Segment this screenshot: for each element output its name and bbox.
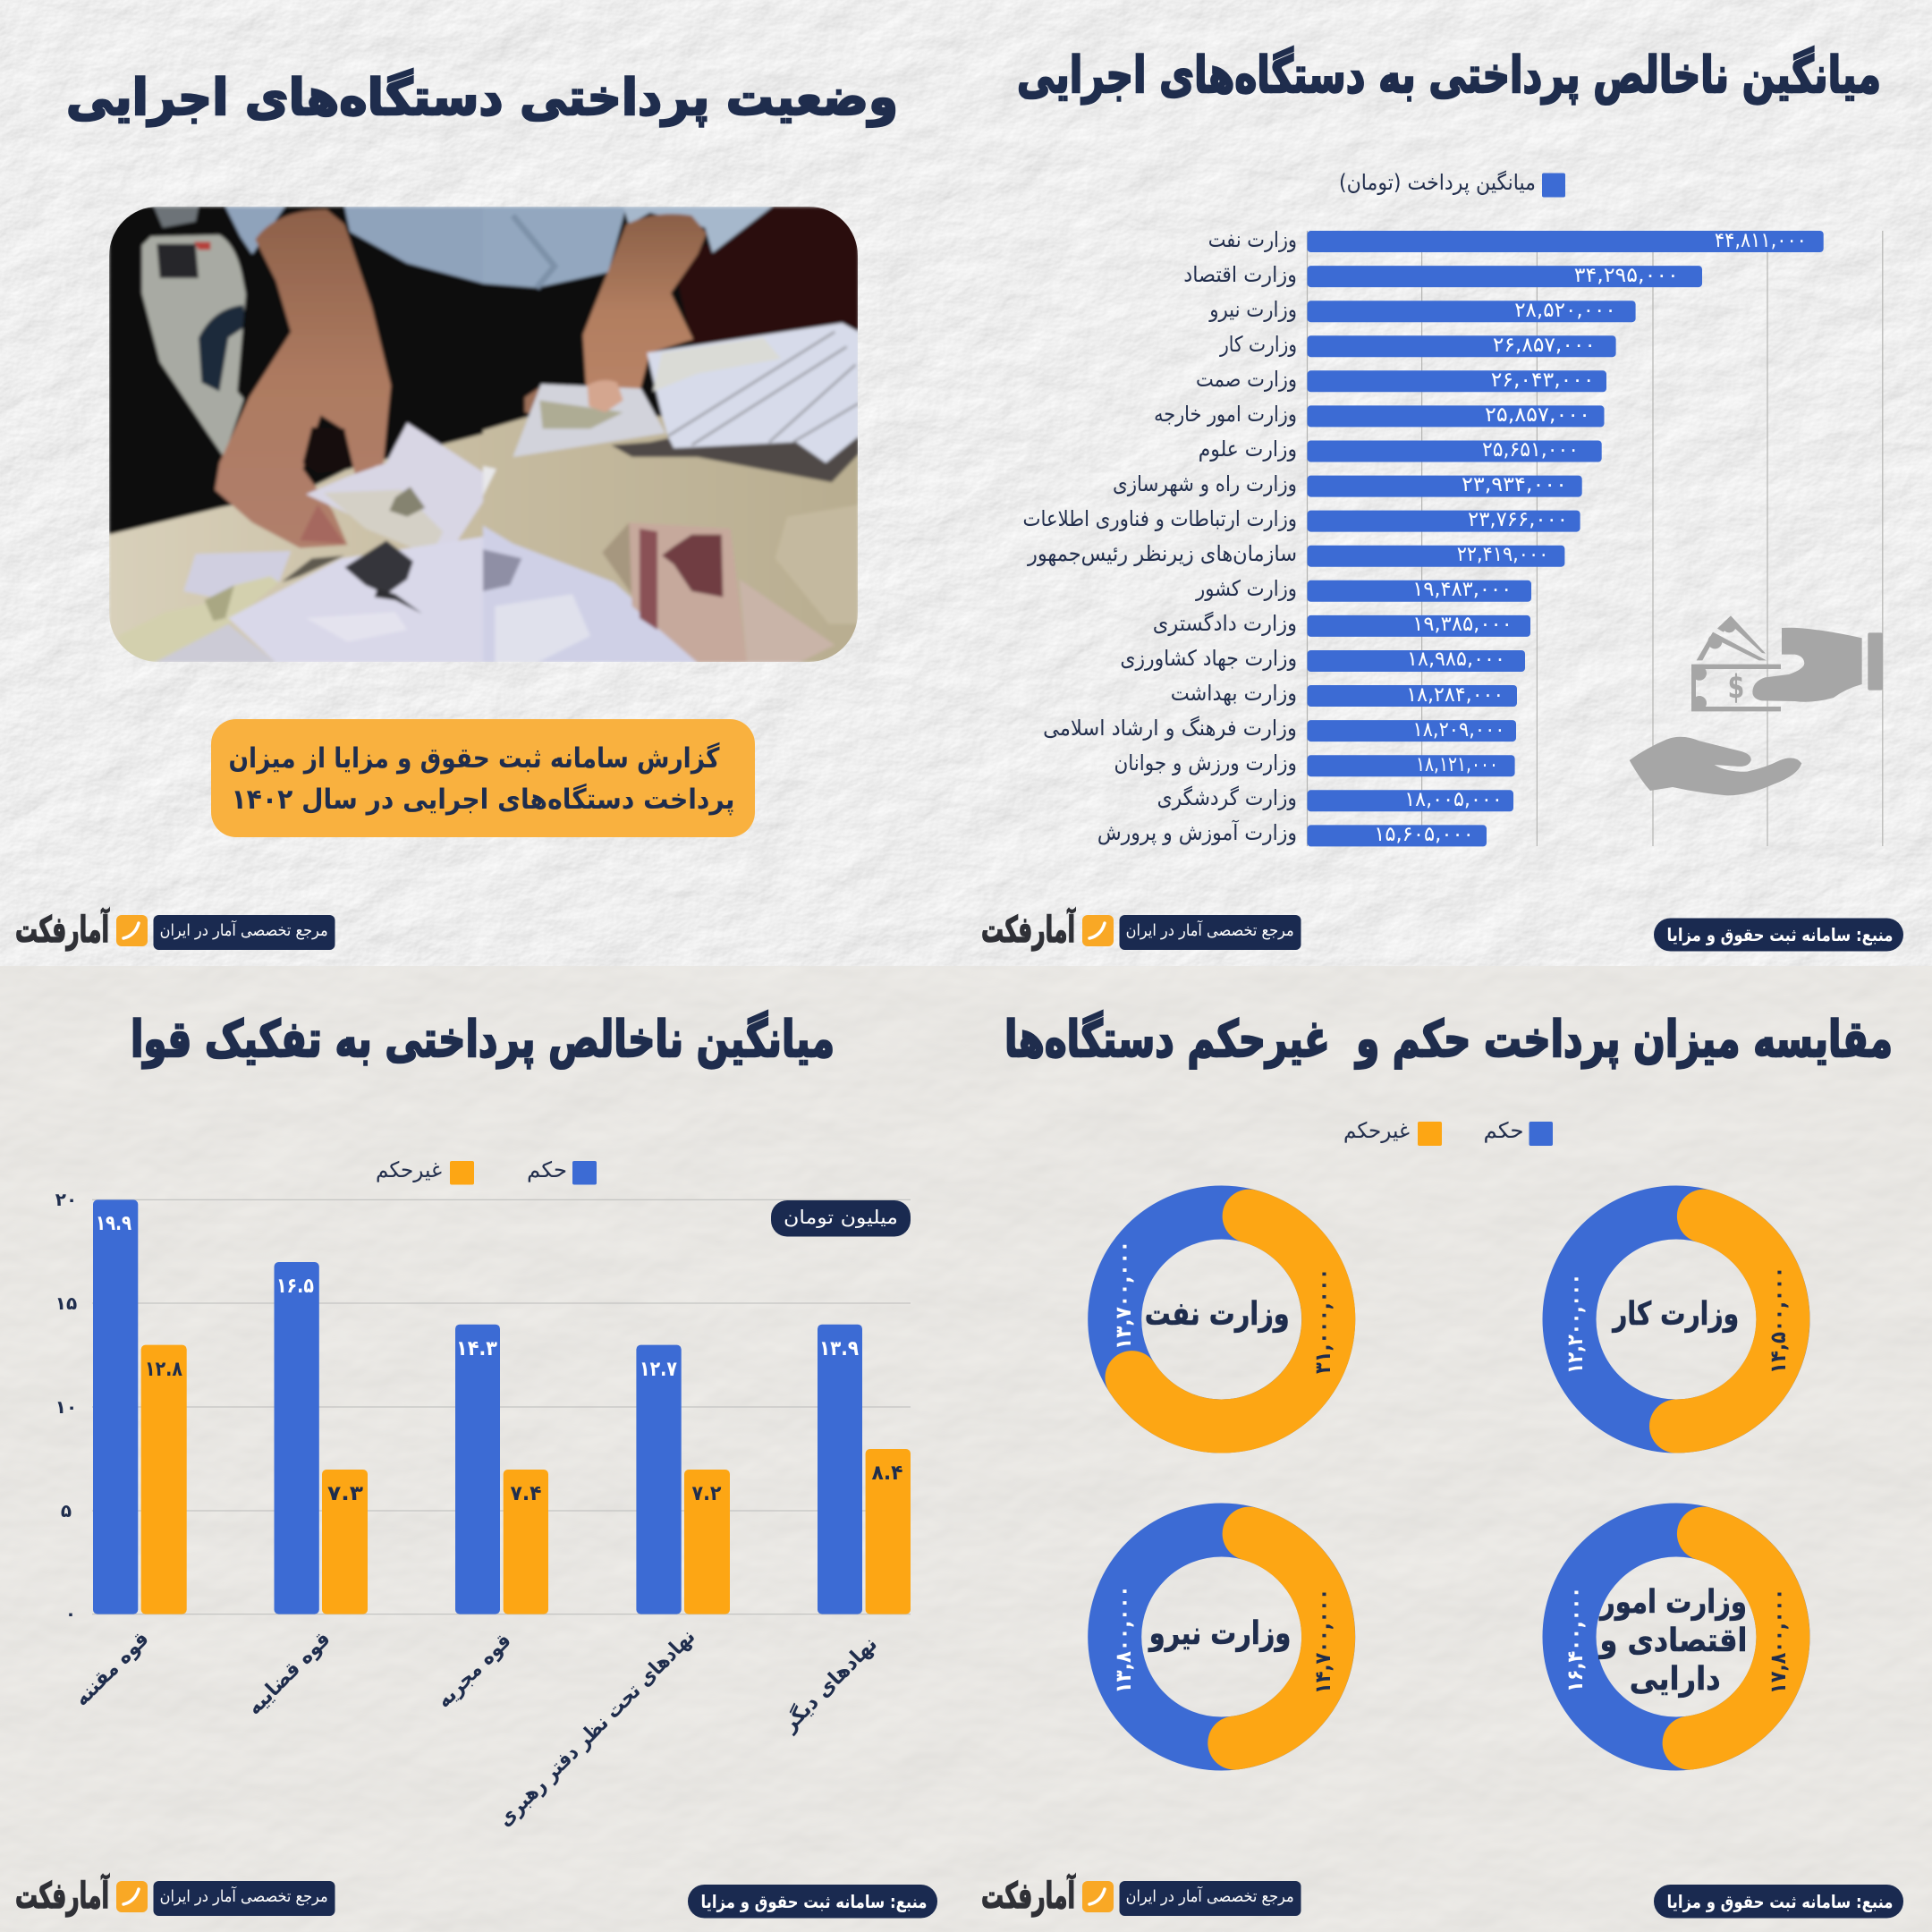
row: energy ministry: ۲۸,۵۲۰,۰۰۰	[1514, 299, 1616, 322]
row: education ministry: ۱۵,۶۰۵,۰۰۰	[1374, 823, 1474, 846]
x axis labels: نهادهای تحت نظر دفتر رهبری	[494, 1625, 699, 1831]
donut: oil ministry	[1111, 1213, 1335, 1427]
photo: hands counting banknotes	[109, 207, 859, 663]
row: health ministry	[1171, 681, 1517, 707]
columns: executive	[455, 1325, 548, 1614]
row: oil ministry: وزارت نفت	[1208, 227, 1297, 252]
row: interior ministry	[1195, 576, 1531, 602]
legend: decree and non-decree: غیرحکم	[376, 1157, 442, 1182]
row: health ministry: وزارت بهداشت	[1171, 681, 1297, 706]
row: communications ministry: وزارت ارتباطات و فناوری اطلاعات	[1023, 506, 1297, 531]
columns: leader's office bodies: ۷.۲	[692, 1482, 721, 1505]
columns: leader's office bodies	[636, 1345, 730, 1614]
logo: bottom left	[15, 1873, 335, 1917]
callout: report note: گزارش سامانه ثبت حقوق و مزایا از میزان	[229, 741, 720, 775]
columns: executive: ۱۴.۳	[456, 1337, 497, 1360]
donut: oil ministry: ۱۳,۷۰۰,۰۰۰	[1111, 1241, 1136, 1350]
columns: judiciary	[274, 1262, 368, 1614]
donut: energy ministry: وزارت نیرو	[1148, 1615, 1291, 1652]
row: culture ministry: ۱۸,۲۰۹,۰۰۰	[1413, 718, 1504, 741]
donut: economy ministry: اقتصادی و	[1598, 1623, 1748, 1659]
unit pill: میلیون تومان	[784, 1207, 898, 1228]
panel: top right bar chart	[981, 47, 1903, 952]
logo: top right	[981, 907, 1301, 951]
donut: labour ministry	[1563, 1213, 1791, 1426]
panel: bottom right donut charts	[981, 1011, 1903, 1918]
logo: bottom right	[981, 1873, 1301, 1917]
legend: decree and non-decree: حکم	[1483, 1118, 1524, 1143]
columns: legislature: ۱۹.۹	[96, 1212, 131, 1235]
row: culture ministry: وزارت فرهنگ و ارشاد اسلامی	[1043, 716, 1297, 741]
row: labour ministry	[1219, 332, 1616, 357]
logo: top right: آمارفکت	[981, 907, 1076, 951]
icon: hand giving money	[1630, 615, 1883, 795]
row: tourism ministry	[1157, 785, 1513, 811]
row: economy ministry: ۳۴,۲۹۵,۰۰۰	[1574, 264, 1679, 287]
row: science ministry: ۲۵,۶۵۱,۰۰۰	[1482, 438, 1579, 462]
row: foreign ministry: وزارت امور خارجه	[1154, 402, 1297, 427]
logo: bottom right: آمارفکت	[981, 1873, 1076, 1917]
row: sports ministry: ۱۸,۱۲۱,۰۰۰	[1416, 753, 1498, 776]
heading: pay by branch: میانگین ناخالص پرداختی به تفکیک قوا	[131, 1011, 835, 1069]
panel: top left intro	[15, 69, 898, 951]
row: roads ministry: وزارت راه و شهرسازی	[1113, 471, 1297, 496]
legend: decree and non-decree: غیرحکم	[1343, 1118, 1410, 1143]
grid lines	[1308, 231, 1883, 846]
grid lines	[92, 1199, 911, 1614]
row: roads ministry	[1113, 471, 1582, 497]
row: agriculture ministry	[1120, 646, 1525, 672]
y axis labels: ۱۵	[55, 1292, 77, 1314]
row: oil ministry: ۴۴,۸۱۱,۰۰۰	[1715, 229, 1807, 252]
y axis labels: ۲۰	[55, 1189, 77, 1210]
legend: average pay: میانگین پرداخت (تومان)	[1339, 170, 1536, 195]
columns: executive: ۷.۴	[510, 1482, 542, 1505]
row: energy ministry: وزارت نیرو	[1208, 297, 1297, 322]
panel: bottom left column chart	[15, 1011, 937, 1918]
row: industry ministry	[1196, 367, 1606, 392]
donut: labour ministry: وزارت کار	[1612, 1296, 1739, 1333]
row: foreign ministry	[1154, 402, 1605, 427]
donut: energy ministry: ۱۳,۸۰۰,۰۰۰	[1111, 1585, 1136, 1694]
y axis labels: ۱۰	[55, 1396, 77, 1418]
row: labour ministry: وزارت کار	[1219, 332, 1297, 357]
donut: economy ministry	[1563, 1530, 1791, 1744]
legend: decree and non-decree	[376, 1157, 597, 1184]
row: education ministry	[1097, 819, 1487, 846]
columns: legislature	[93, 1199, 187, 1614]
donut: oil ministry: ۳۱,۰۰۰,۰۰۰	[1310, 1268, 1335, 1374]
donut: economy ministry: وزارت امور	[1598, 1584, 1747, 1621]
row: justice ministry: ۱۹,۳۸۵,۰۰۰	[1412, 613, 1513, 636]
row: industry ministry: وزارت صمت	[1196, 367, 1297, 392]
legend: decree and non-decree: حکم	[527, 1157, 567, 1182]
row: education ministry: وزارت آموزش و پرورش	[1097, 819, 1297, 845]
donut: economy ministry: ۱۶,۴۰۰,۰۰۰	[1563, 1587, 1588, 1692]
source pill: top right	[1654, 918, 1903, 952]
row: sports ministry	[1114, 750, 1515, 776]
unit pill	[771, 1200, 911, 1236]
logo: top left	[15, 907, 335, 951]
row: economy ministry	[1183, 262, 1702, 287]
logo: top left: مرجع تخصصی آمار در ایران	[160, 919, 328, 940]
row: presidential organisations	[1027, 541, 1564, 567]
row: science ministry	[1199, 436, 1602, 462]
donut: oil ministry: وزارت نفت	[1145, 1296, 1290, 1333]
row: labour ministry: ۲۶,۸۵۷,۰۰۰	[1493, 334, 1596, 357]
row: communications ministry	[1023, 506, 1580, 532]
row: energy ministry	[1208, 297, 1636, 322]
row: foreign ministry: ۲۵,۸۵۷,۰۰۰	[1485, 403, 1590, 427]
row: communications ministry: ۲۳,۷۶۶,۰۰۰	[1468, 508, 1568, 531]
donut: economy ministry: ۱۷,۸۰۰,۰۰۰	[1766, 1589, 1791, 1694]
row: oil ministry	[1208, 227, 1824, 252]
row: agriculture ministry: ۱۸,۹۸۵,۰۰۰	[1407, 648, 1505, 671]
row: tourism ministry: ۱۸,۰۰۵,۰۰۰	[1404, 788, 1503, 811]
row: agriculture ministry: وزارت جهاد کشاورزی	[1120, 646, 1297, 671]
columns: other bodies	[818, 1325, 911, 1614]
row: economy ministry: وزارت اقتصاد	[1183, 262, 1297, 287]
y axis labels: ۵	[61, 1500, 72, 1521]
x axis labels: قوه قضاییه	[242, 1627, 335, 1720]
legend: decree and non-decree	[1343, 1118, 1553, 1146]
donut: energy ministry: ۱۴,۷۰۰,۰۰۰	[1310, 1589, 1335, 1694]
logo: top left: آمارفکت	[15, 907, 110, 951]
row: presidential organisations: ۲۲,۴۱۹,۰۰۰	[1457, 543, 1548, 566]
row: roads ministry: ۲۳,۹۳۴,۰۰۰	[1462, 473, 1567, 496]
row: presidential organisations: سازمان‌های زیرنظر رئیس‌جمهور	[1027, 541, 1297, 566]
logo: bottom right: مرجع تخصصی آمار در ایران	[1126, 1885, 1294, 1906]
row: interior ministry: ۱۹,۴۸۳,۰۰۰	[1412, 578, 1512, 601]
row: justice ministry	[1153, 611, 1530, 637]
row: sports ministry: وزارت ورزش و جوانان	[1114, 750, 1297, 775]
source pill: bottom left: منبع: سامانه ثبت حقوق و مزایا	[701, 1891, 927, 1912]
row: justice ministry: وزارت دادگستری	[1153, 611, 1297, 636]
row: tourism ministry: وزارت گردشگری	[1157, 785, 1297, 810]
y axis labels: ۰	[65, 1603, 76, 1624]
callout: report note: پرداخت دستگاه‌های اجرایی در سال ۱۴۰۲	[231, 783, 735, 816]
row: science ministry: وزارت علوم	[1199, 436, 1297, 462]
x axis labels: قوه مقننه	[70, 1627, 154, 1711]
callout: report note	[211, 719, 755, 837]
columns: other bodies: ۱۳.۹	[819, 1337, 859, 1360]
logo: bottom left: آمارفکت	[15, 1873, 110, 1917]
logo: top right: مرجع تخصصی آمار در ایران	[1126, 919, 1294, 940]
icon: hand giving money: $	[1728, 668, 1744, 707]
x axis labels	[70, 1625, 882, 1831]
source pill: bottom right	[1654, 1885, 1903, 1918]
icon: receiving hand	[1630, 737, 1801, 795]
heading: status of payments: وضعیت پرداختی دستگاه‌های اجرایی	[66, 69, 898, 127]
x axis labels: قوه مجریه	[432, 1629, 516, 1713]
source pill: bottom left	[688, 1885, 937, 1918]
donut: labour ministry: ۱۴,۵۰۰,۰۰۰	[1766, 1267, 1791, 1374]
x axis labels: نهادهای دیگر	[777, 1631, 882, 1737]
y axis labels	[55, 1189, 77, 1624]
columns: judiciary: ۷.۳	[327, 1482, 363, 1505]
columns: legislature: ۱۲.۸	[145, 1358, 182, 1381]
donut: energy ministry	[1111, 1530, 1335, 1744]
columns: leader's office bodies: ۱۲.۷	[640, 1358, 677, 1381]
donut: labour ministry: ۱۲,۲۰۰,۰۰۰	[1563, 1274, 1588, 1374]
donut: economy ministry: دارایی	[1630, 1661, 1721, 1698]
row: industry ministry: ۲۶,۰۴۳,۰۰۰	[1491, 369, 1594, 392]
row: culture ministry	[1043, 716, 1516, 741]
columns: judiciary: ۱۶.۵	[276, 1275, 314, 1298]
row: health ministry: ۱۸,۲۸۴,۰۰۰	[1406, 683, 1504, 707]
columns: other bodies: ۸.۴	[871, 1462, 903, 1485]
row: interior ministry: وزارت کشور	[1195, 576, 1297, 601]
logo: bottom left: مرجع تخصصی آمار در ایران	[160, 1885, 328, 1906]
